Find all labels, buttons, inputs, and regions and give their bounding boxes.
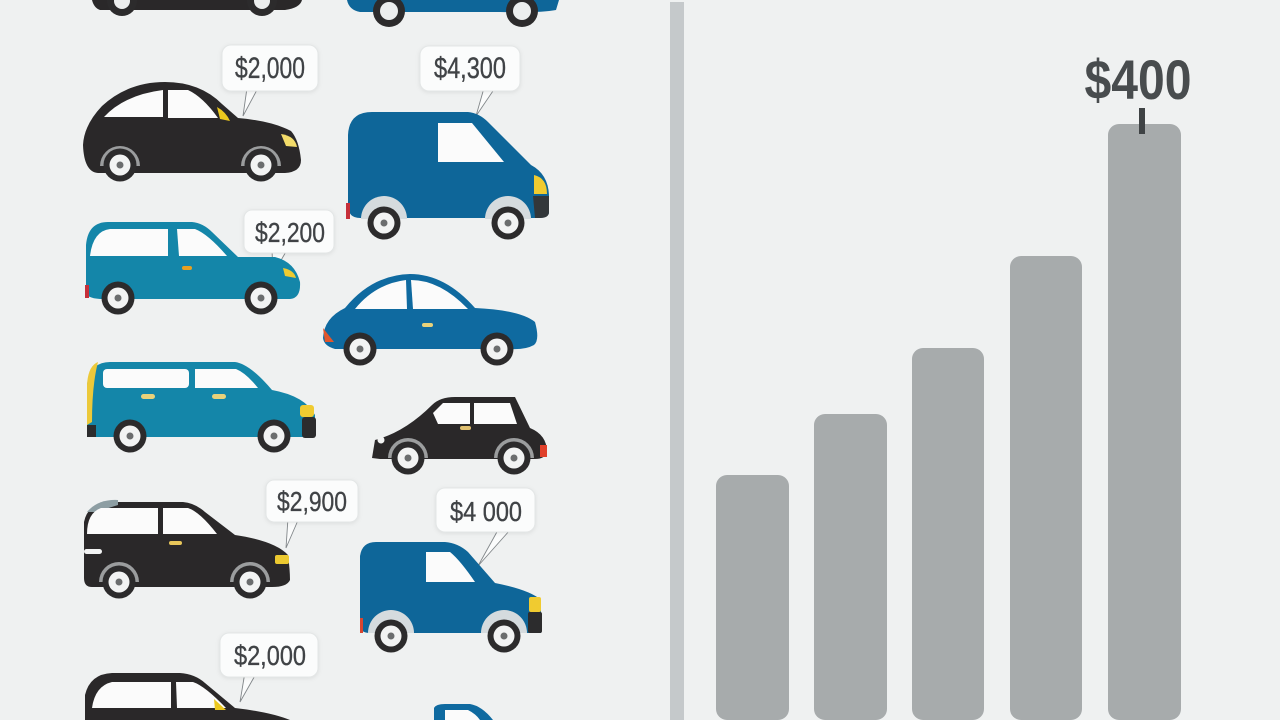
callout: $2,000 top left: $2,000 [235,52,305,85]
car: teal van with yellow rear [87,362,316,452]
car: teal minivan [85,222,300,314]
car: black minivan [84,500,290,598]
bar 5 [1108,124,1181,720]
car: top cropped blue car [347,0,559,27]
callout: $4,300 [420,46,520,116]
callout: $2,000 top left [222,45,318,116]
car: black hatchback [83,82,301,182]
bar 1 [716,475,789,720]
callout: $4,000: $4 000 [450,496,522,527]
bar value tick [1139,108,1145,134]
callout: $2,900: $2,900 [277,486,347,517]
callout: $2,200 [244,210,334,274]
callout: $4,000 [436,488,535,566]
car: blue sedan [323,274,537,366]
car: bottom cropped black car [85,673,290,720]
callout: $2,200: $2,200 [255,217,325,248]
car: bottom cropped blue car [434,704,493,720]
car: top left cropped black car [92,0,302,16]
car: small black hatchback [372,397,547,474]
callout: $2,000 bottom: $2,000 [234,640,306,671]
chart axis [670,2,684,720]
callout: $2,900 [266,480,358,548]
callout: $4,300: $4,300 [434,52,506,85]
callout: $2,000 bottom [220,633,318,702]
bar 3 [912,348,984,720]
bar chart [716,124,1181,720]
bar 2 [814,414,887,720]
bar value label: $400 [1084,48,1192,111]
car: blue panel van [360,542,542,652]
bar 4 [1010,256,1082,720]
car: blue van [346,112,549,240]
